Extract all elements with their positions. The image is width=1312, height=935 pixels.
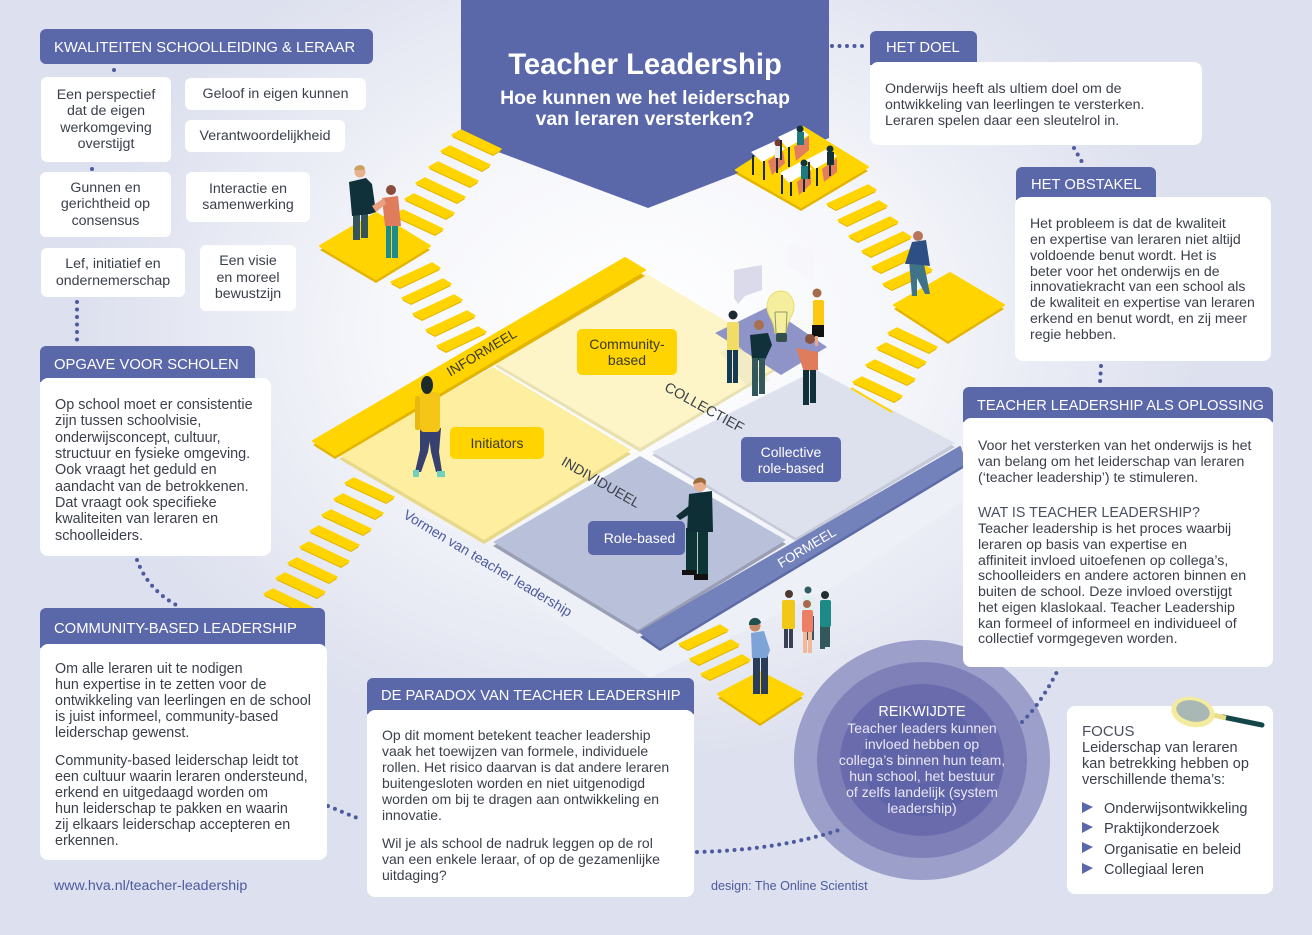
tile: collective role-based bbox=[652, 370, 955, 541]
panel: community-based leadership bbox=[40, 608, 327, 860]
dotted connectors bbox=[77, 46, 1101, 852]
quality: geloof: Geloof in eigen kunnen bbox=[203, 86, 348, 102]
body: is juist informeel, community-based bbox=[55, 709, 278, 725]
reikwijdte body: collega’s binnen hun team, bbox=[839, 752, 1005, 768]
body bbox=[1015, 197, 1271, 361]
reikwijdte body: invloed hebben op bbox=[865, 736, 979, 752]
definition text: schoolleiders en andere actoren binnen en bbox=[978, 568, 1246, 584]
reikwijdte body: Teacher leaders kunnen bbox=[847, 720, 997, 736]
quality: visie: Een visie bbox=[219, 253, 277, 269]
body: worden om bij te dragen aan ontwikkeling en bbox=[382, 791, 659, 807]
focus list: Collegiaal leren bbox=[1104, 862, 1204, 878]
stairs: bottom left bbox=[264, 478, 394, 615]
tile: initiators bbox=[339, 367, 631, 544]
body: Op dit moment betekent teacher leadership bbox=[382, 727, 650, 743]
quality: visie: en moreel bbox=[216, 270, 280, 286]
quality: lef: Lef, initiatief en bbox=[65, 256, 161, 272]
quality: gunnen: gerichtheid op bbox=[61, 196, 150, 212]
quality: interactie bbox=[186, 172, 310, 222]
circles: reikwijdte bbox=[794, 640, 1050, 880]
quality: visie bbox=[200, 245, 296, 311]
reikwijdte text bbox=[839, 704, 1005, 816]
intro text: Voor het versterken van het onderwijs is het bbox=[978, 437, 1251, 453]
quality: verantwoordelijkheid: Verantwoordelijkheid bbox=[200, 128, 330, 144]
reikwijdte body: leadership) bbox=[887, 800, 957, 816]
body: rollen. Het risico daarvan is dat andere leraren bbox=[382, 759, 669, 775]
heading: HET OBSTAKEL bbox=[1031, 177, 1141, 193]
panel: de paradox van teacher leadership bbox=[367, 678, 694, 897]
body: erkend en benut wordt, en zij meer bbox=[1030, 310, 1247, 326]
body: leiderschap gewenst. Community-based leiderschap leidt tot bbox=[55, 725, 298, 769]
quality: gunnen: Gunnen en bbox=[70, 180, 141, 196]
body: van een enkele leraar, of op de gezamenlijke bbox=[382, 851, 660, 867]
panel: kwaliteiten schoolleiding & leraar bbox=[40, 29, 373, 64]
tile label: Community-based: Community- bbox=[589, 336, 665, 352]
main heading: Teacher Leadership bbox=[508, 49, 782, 81]
title bbox=[500, 49, 790, 130]
tile: community-based bbox=[495, 273, 790, 452]
reikwijdte body: hun school, het bestuur bbox=[849, 768, 995, 784]
tile label: Collective role-based: Collective bbox=[761, 444, 821, 460]
body: kwaliteiten van leraren en bbox=[55, 511, 218, 527]
icon: magnifying glass bbox=[1171, 696, 1264, 728]
body: een cultuur waarin leraren ondersteund, bbox=[55, 769, 308, 785]
axis label: collectief: COLLECTIEF bbox=[662, 380, 746, 436]
quality: geloof bbox=[185, 78, 366, 110]
stairs: bottom centre bbox=[679, 625, 750, 681]
platform: left bbox=[320, 213, 430, 283]
body: Dat vraagt ook specifieke bbox=[55, 495, 217, 511]
quality: visie: bewustzijn bbox=[215, 286, 281, 302]
body: zij elkaars leiderschap accepteren en bbox=[55, 817, 290, 833]
platform: right bbox=[894, 273, 1004, 344]
definition text: affiniteit invloed uitoefenen op collega’s, bbox=[978, 552, 1228, 568]
reikwijdte body: of zelfs landelijk (system bbox=[846, 784, 998, 800]
figure: role-based man bbox=[676, 478, 713, 580]
tile label: Role-based bbox=[588, 521, 685, 555]
body bbox=[40, 378, 271, 556]
heading: DE PARADOX VAN TEACHER LEADERSHIP bbox=[381, 688, 681, 704]
figures: handshake bbox=[349, 165, 401, 258]
stairs: right lower bbox=[851, 328, 937, 412]
heading bbox=[870, 31, 977, 65]
platform: bottom bbox=[718, 672, 803, 726]
focus list: Organisatie en beleid bbox=[1104, 842, 1241, 858]
body: innovatiekracht van een school als bbox=[1030, 278, 1245, 294]
tile label: Community-based: based bbox=[608, 352, 646, 368]
body: zijn tussen schoolvisie, bbox=[55, 413, 201, 429]
body: voldoende benut wordt. Het is bbox=[1030, 247, 1216, 263]
body: uitdaging? bbox=[382, 867, 447, 883]
figures: classroom desks bbox=[751, 126, 837, 196]
axis label: vormen van teacher leadership: Vormen van teacher leadership bbox=[401, 506, 575, 620]
body: structuur en fysieke omgeving. bbox=[55, 446, 250, 462]
body: en expertise van leraren niet altijd bbox=[1030, 231, 1241, 247]
focus list: Praktijkonderzoek bbox=[1104, 821, 1219, 837]
focus list: Onderwijsontwikkeling bbox=[1104, 801, 1247, 817]
panel: het obstakel bbox=[1015, 167, 1271, 361]
intro text bbox=[978, 437, 1252, 485]
body: ontwikkeling van leerlingen en de school bbox=[55, 693, 311, 709]
panel: opgave voor scholen bbox=[40, 346, 271, 556]
definition text: buiten de school. Deze invloed overstijgt bbox=[978, 584, 1232, 600]
panel: kwaliteiten schoolleiding & leraar: KWALITEITEN SCHOOLLEIDING & LERAAR bbox=[54, 40, 355, 56]
definition text: leraren op basis van expertise en bbox=[978, 537, 1187, 553]
quality: gunnen bbox=[40, 172, 171, 237]
reikwijdte heading: REIKWIJDTE bbox=[878, 704, 966, 720]
body: ontwikkeling van leerlingen te versterken. bbox=[885, 97, 1144, 113]
intro text: (‘teacher leadership’) te stimuleren. bbox=[978, 469, 1198, 485]
axis label: informeel: INFORMEEL bbox=[444, 326, 519, 379]
definition text: collectief vormgegeven worden. bbox=[978, 631, 1178, 647]
body: hun leiderschap te pakken en waarin bbox=[55, 801, 288, 817]
stairs: top right bbox=[827, 185, 932, 291]
panel: het doel bbox=[870, 31, 1202, 145]
heading: COMMUNITY-BASED LEADERSHIP bbox=[54, 621, 297, 637]
focus list bbox=[1082, 801, 1247, 878]
ground shadow strip bbox=[340, 445, 965, 678]
subheading: wat is teacher leadership: WAT IS TEACHER LEADERSHIP? bbox=[978, 505, 1200, 521]
body bbox=[40, 644, 327, 860]
footer: website: www.hva.nl/teacher-leadership bbox=[54, 878, 247, 894]
quality: eigen werkomgeving bbox=[41, 77, 171, 162]
stairs: left below platform bbox=[391, 263, 486, 353]
body: Op school moet er consistentie bbox=[55, 397, 253, 413]
body: buitengesloten worden en niet uitgenodigd bbox=[382, 775, 645, 791]
focus text: Leiderschap van leraren bbox=[1082, 740, 1238, 756]
body: regie hebben. bbox=[1030, 326, 1116, 342]
heading bbox=[1016, 167, 1156, 200]
heading: TEACHER LEADERSHIP ALS OPLOSSING bbox=[977, 398, 1264, 414]
figure: thinking man bbox=[749, 618, 770, 694]
heading bbox=[40, 346, 255, 382]
focus heading: FOCUS bbox=[1082, 723, 1134, 740]
tile label: Collective role-based bbox=[741, 437, 841, 482]
bar: informeel bbox=[313, 258, 645, 459]
heading: HET DOEL bbox=[886, 40, 960, 56]
bar: formeel bbox=[640, 447, 965, 651]
reikwijdte body bbox=[839, 720, 1005, 816]
figure: initiator woman bbox=[413, 376, 445, 477]
body: Leraren spelen daar een sleutelrol in. bbox=[885, 113, 1119, 129]
subheading bbox=[500, 87, 790, 130]
definition text: Teacher leadership is het proces waarbij bbox=[978, 521, 1231, 537]
focus text: verschillende thema’s: bbox=[1082, 772, 1225, 788]
body: vaak het toewijzen van formele, individuele bbox=[382, 743, 648, 759]
axis label: individueel: INDIVIDUEEL bbox=[559, 453, 643, 511]
body: Onderwijs heeft als ultiem doel om de bbox=[885, 81, 1122, 97]
quality: lef: ondernemerschap bbox=[56, 272, 170, 288]
footer: design credit: design: The Online Scientist bbox=[711, 879, 868, 893]
stairs: top left bbox=[394, 130, 501, 236]
focus text: kan betrekking hebben op bbox=[1082, 756, 1249, 772]
tile label: Community-based bbox=[577, 329, 677, 375]
heading bbox=[40, 608, 325, 648]
tile: role-based bbox=[493, 456, 786, 634]
definition text: kan formeel of informeel en individueel of bbox=[978, 616, 1237, 632]
subheading: van leraren versterken? bbox=[536, 108, 754, 130]
body bbox=[367, 710, 694, 897]
heading bbox=[963, 387, 1273, 422]
body: de kwaliteit en expertise van leraren bbox=[1030, 294, 1255, 310]
title banner bbox=[461, 0, 829, 208]
tile label: Collective role-based: role-based bbox=[758, 460, 824, 476]
body bbox=[870, 62, 1202, 145]
body bbox=[963, 418, 1273, 667]
body: hun expertise in te zetten voor de bbox=[55, 677, 266, 693]
quality: interactie: samenwerking bbox=[202, 197, 294, 213]
body: onderwijsconcept, cultuur, bbox=[55, 430, 221, 446]
figure: walking man bbox=[905, 231, 930, 296]
quality: eigen werkomgeving: werkomgeving bbox=[60, 120, 152, 136]
focus text bbox=[1082, 740, 1249, 788]
quality: eigen werkomgeving: overstijgt bbox=[78, 136, 134, 152]
tile label: Initiators bbox=[450, 427, 544, 459]
panel: teacher leadership als oplossing bbox=[963, 387, 1273, 667]
body: innovatie. Wil je als school de nadruk leggen op de rol bbox=[382, 807, 653, 851]
body: schoolleiders. bbox=[55, 528, 143, 544]
body: erkennen. bbox=[55, 833, 119, 849]
heading bbox=[367, 678, 694, 714]
platform: classroom bbox=[736, 127, 868, 211]
intro text: van belang om het leiderschap van leraren bbox=[978, 453, 1244, 469]
body: beter voor het onderwijs en de bbox=[1030, 263, 1220, 279]
definition text: het eigen klaslokaal. Teacher Leadership bbox=[978, 600, 1235, 616]
lightbulb group bbox=[715, 244, 827, 405]
body: Het probleem is dat de kwaliteit bbox=[1030, 215, 1226, 231]
body: erkend en uitgedaagd worden om bbox=[55, 785, 268, 801]
quality: gunnen: consensus bbox=[72, 213, 139, 229]
body: Ook vraagt het geduld en bbox=[55, 462, 217, 478]
tile label: Role-based: Role-based bbox=[604, 530, 675, 546]
definition text bbox=[978, 521, 1246, 647]
quality: lef bbox=[41, 248, 185, 297]
subheading: Hoe kunnen we het leiderschap bbox=[500, 87, 790, 109]
quality: verantwoordelijkheid bbox=[185, 120, 345, 152]
body: aandacht van de betrokkenen. bbox=[55, 479, 249, 495]
axis label: formeel: FORMEEL bbox=[775, 524, 839, 571]
quality: eigen werkomgeving: dat de eigen bbox=[67, 103, 145, 119]
tile label: Initiators: Initiators bbox=[471, 435, 523, 451]
quality: interactie: Interactie en bbox=[209, 180, 287, 196]
body: Om alle leraren uit te nodigen bbox=[55, 661, 243, 677]
heading: OPGAVE VOOR SCHOLEN bbox=[54, 357, 239, 373]
panel: focus bbox=[1067, 706, 1273, 894]
quality: eigen werkomgeving: Een perspectief bbox=[57, 86, 155, 102]
figures: group of four bbox=[782, 586, 831, 653]
